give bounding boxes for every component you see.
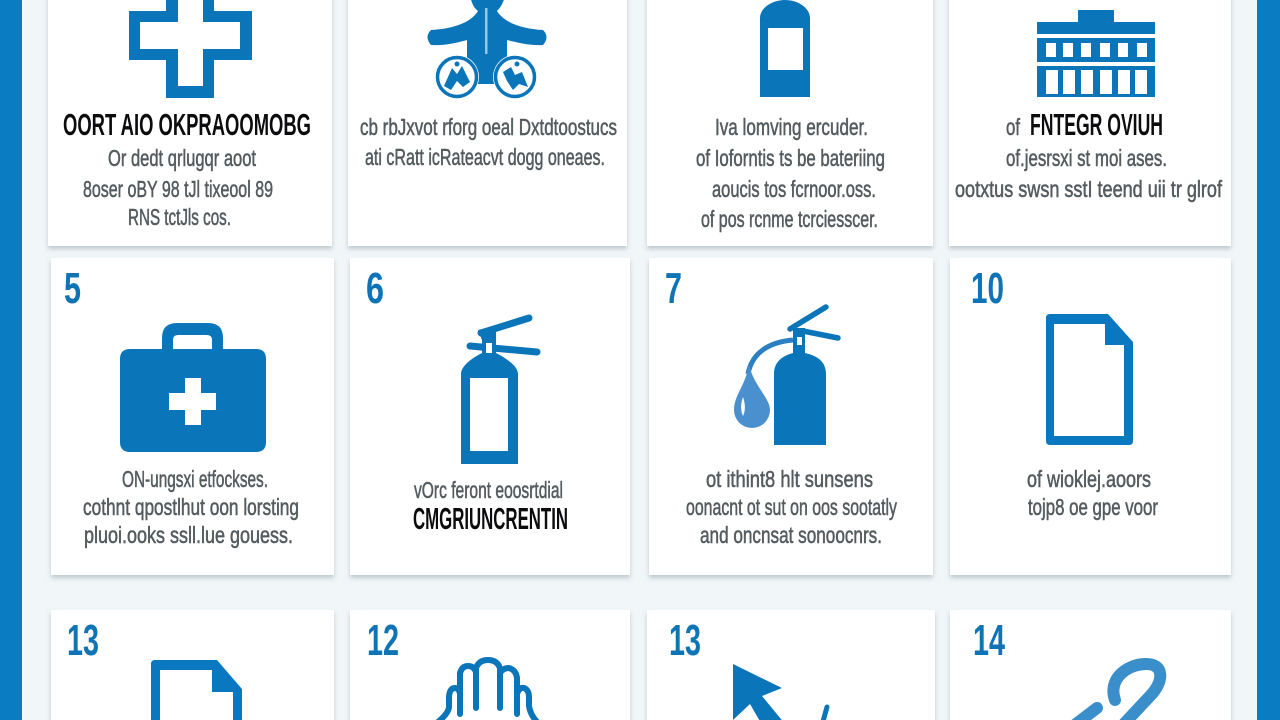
card text: oonacnt ot sut on oos sootatly <box>686 494 897 520</box>
card text: Iva lomving ercuder. <box>715 114 868 140</box>
card: figure with wheels <box>348 0 627 246</box>
card text: tojp8 oe gpe voor <box>1028 494 1158 520</box>
number: 13 <box>669 616 701 665</box>
card text: aoucis tos fcrnoor.oss. <box>712 176 876 202</box>
icon: cross <box>129 0 252 98</box>
icon: first aid kit <box>120 323 266 452</box>
icon: figure <box>428 0 546 99</box>
card heading: CMGRIUNCRENTIN <box>413 501 568 536</box>
card 14: chain link <box>950 610 1231 720</box>
number: 7 <box>665 264 682 313</box>
card text: of wioklej.aoors <box>1027 466 1151 492</box>
card text: of.jesrsxi st moi ases. <box>1006 145 1167 171</box>
icon: chain link <box>1076 664 1160 720</box>
number: 14 <box>973 616 1005 665</box>
card text: ati cRatt icRateacvt dogg oneaes. <box>365 144 605 170</box>
card text: ot ithint8 hlt sunsens <box>706 466 873 492</box>
card text <box>955 145 1222 202</box>
card text <box>696 114 885 232</box>
card text <box>83 145 273 230</box>
card text: and oncnsat sonoocnrs. <box>700 522 882 548</box>
number: 12 <box>367 616 399 665</box>
card 13: document <box>51 610 334 720</box>
card heading: FNTEGR OVIUH <box>1030 107 1163 142</box>
card: cylinder <box>647 0 933 246</box>
icon: arrow <box>733 664 827 720</box>
icon: fire extinguisher <box>461 318 537 464</box>
card 7: extinguisher with hose <box>649 258 933 575</box>
card text <box>1027 466 1158 520</box>
card heading: OORT AIO OKPRAOOMOBG <box>63 107 311 142</box>
card text: pluoi.ooks ssll.lue gouess. <box>84 522 293 548</box>
card 12: hand <box>350 610 630 720</box>
card: first aid cross <box>48 0 332 246</box>
card text: ON-ungsxi etfockses. <box>122 466 268 492</box>
left blue border <box>0 0 22 720</box>
card 10: document <box>950 258 1231 575</box>
card 6: extinguisher outline <box>350 258 630 575</box>
card text: of Ioforntis ts be bateriing <box>696 145 885 171</box>
card text: of pos rcnme tcrciesscer. <box>701 206 878 232</box>
card heading: of <box>1006 114 1020 140</box>
number: 5 <box>64 264 81 313</box>
number: 6 <box>366 264 384 313</box>
card text <box>686 466 897 548</box>
icon: cylinder <box>760 0 810 97</box>
number: 13 <box>67 616 99 665</box>
card text: Or dedt qrlugqr aoot <box>108 145 256 171</box>
icon: hand <box>438 660 537 720</box>
right blue border <box>1257 0 1280 720</box>
card: building <box>949 0 1231 246</box>
card text: cb rbJxvot rforg oeal Dxtdtoostucs <box>360 114 617 140</box>
icon: building <box>1037 10 1155 97</box>
card text <box>83 466 299 548</box>
card text: cothnt qpostlhut oon lorsting <box>83 494 299 520</box>
number: 10 <box>971 264 1004 313</box>
card text: vOrc feront eoosrtdial <box>414 477 563 503</box>
card text: RNS tctJls cos. <box>128 204 231 230</box>
card 5: first aid kit <box>51 258 334 575</box>
card 13b: arrow <box>647 610 935 720</box>
card text: 8oser oBY 98 tJl tixeool 89 <box>83 176 273 202</box>
icon: document <box>1046 314 1133 445</box>
icon: extinguisher with drop <box>734 307 838 445</box>
icon: document <box>151 660 242 720</box>
card heading <box>1006 107 1163 142</box>
card text <box>360 114 617 170</box>
